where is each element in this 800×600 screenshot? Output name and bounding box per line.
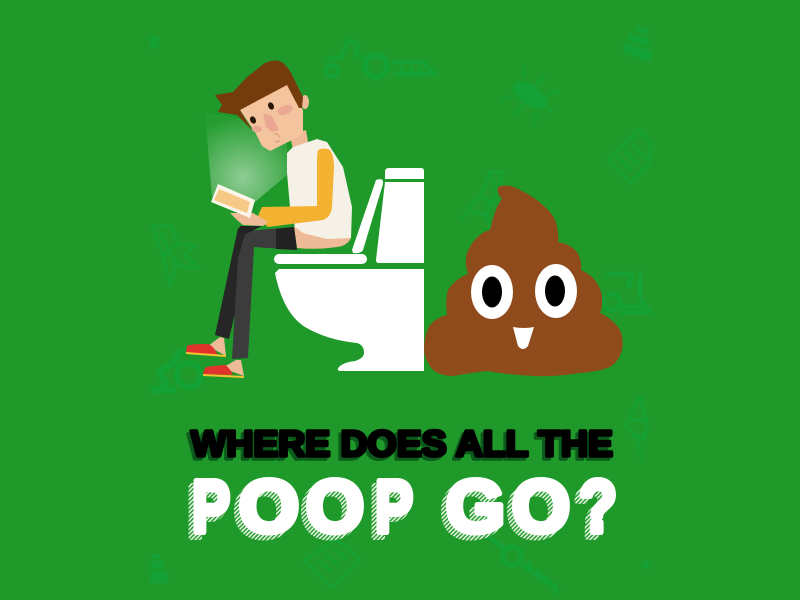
title white letters: O [306, 465, 364, 548]
title hatched shadow: O [234, 470, 294, 553]
background icons [150, 26, 652, 594]
toilet bowl [275, 269, 424, 371]
rear foot [208, 337, 226, 356]
icon: calculator diamond [607, 130, 651, 183]
icon: tractor bottom [488, 536, 558, 594]
icon: tractor lower left [150, 348, 201, 392]
bare hip [294, 226, 351, 249]
neck [290, 130, 308, 150]
title hatched shadow [187, 470, 612, 553]
toilet seat [274, 254, 367, 264]
phone [211, 184, 255, 218]
title white letters: O [239, 465, 299, 548]
title line two [187, 465, 617, 553]
face [240, 84, 303, 151]
title line one: WHERE DOES ALL THE [188, 426, 610, 467]
toilet seat lid [352, 179, 383, 253]
icon: small stack bottom left [150, 554, 169, 583]
rear sole [186, 352, 226, 357]
ear [301, 95, 309, 109]
title white letters: P [375, 465, 413, 548]
man reading phone [186, 60, 352, 378]
rear slipper [186, 344, 218, 356]
front slipper [203, 365, 233, 375]
title hatched shadow: P [187, 470, 227, 553]
rear trouser leg [215, 228, 254, 339]
icon: stacked cone top [623, 26, 652, 62]
toilet tank [376, 182, 424, 263]
icon: pylon left [152, 226, 198, 284]
near trouser leg [232, 227, 297, 359]
title hatched shadow: ? [574, 470, 612, 553]
eyes [249, 101, 275, 125]
icon: calculator lower [304, 539, 360, 588]
title hatched shadow: O [301, 470, 359, 553]
hair [215, 60, 303, 130]
sleeve [257, 148, 334, 227]
front sole [203, 374, 244, 378]
mouth [274, 134, 280, 142]
front foot [222, 360, 244, 376]
toilet [274, 168, 424, 371]
poop body [424, 186, 623, 376]
hand [230, 213, 268, 226]
light beam from phone [205, 113, 287, 202]
title hatched shadow: P [370, 470, 410, 553]
icon: pylon right [626, 396, 648, 462]
icon: pylon by poop [461, 172, 503, 228]
trouser shadow [238, 226, 297, 250]
poop emoji [424, 186, 623, 376]
title white letters: G [446, 465, 505, 548]
phone screen [214, 189, 250, 213]
title hatched shadow: G [441, 470, 500, 553]
cheeks and nose [252, 103, 294, 132]
left eye [471, 265, 513, 319]
icon: dots [150, 36, 650, 569]
icon: tractor top [326, 40, 434, 77]
icon: bug [500, 64, 566, 130]
tooth [513, 327, 534, 349]
toilet tank lid [385, 168, 424, 179]
icon: faint calculator behind beam [196, 116, 239, 155]
right eye [535, 264, 577, 318]
title line one: WHERE DOES ALL THE [191, 423, 613, 464]
title white letters: O [512, 465, 570, 548]
title white letters [192, 465, 617, 548]
icon: tractor right [604, 272, 650, 312]
shirt [287, 139, 352, 239]
title white letters: P [192, 465, 230, 548]
title white letters: ? [579, 465, 617, 548]
title hatched shadow: O [507, 470, 565, 553]
